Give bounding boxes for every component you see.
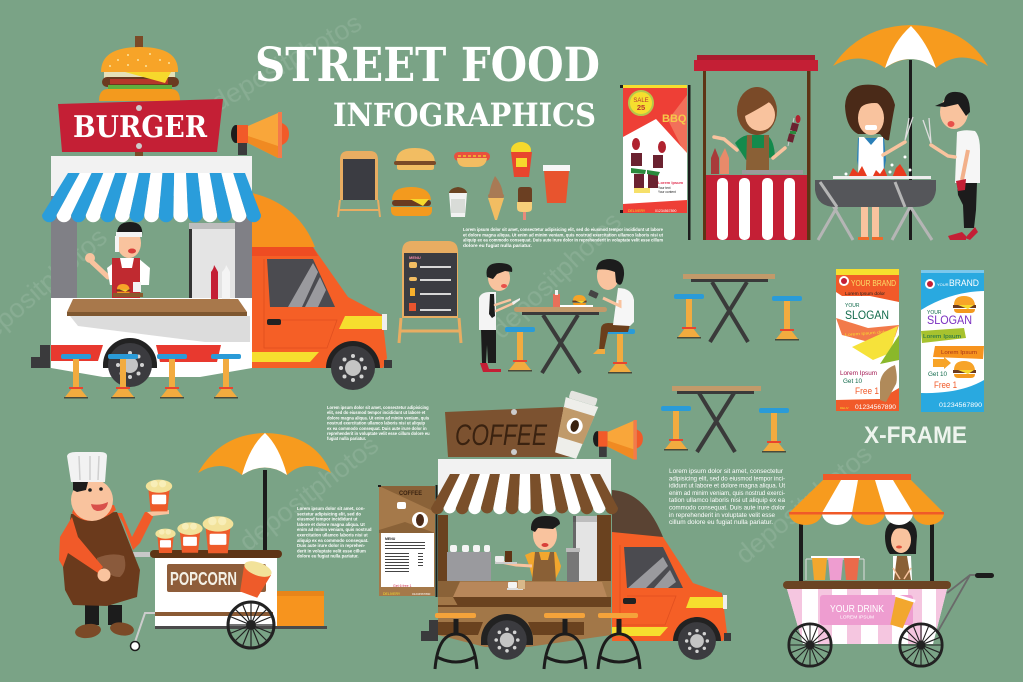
table B	[672, 386, 761, 452]
x-frame blue	[921, 270, 984, 412]
barista	[495, 516, 580, 583]
x-frame orange	[836, 269, 899, 411]
popcorn cups	[155, 516, 233, 553]
menu board: MENU	[409, 255, 421, 260]
coffee banner: MENU	[385, 537, 396, 541]
table A	[683, 274, 775, 342]
drink cart	[783, 474, 994, 666]
text block: right of coffee truck: ididunt ut labore et dolore magna aliqua. Ut	[669, 483, 785, 490]
x-frame orange: Free 1	[855, 386, 879, 396]
BBQ banner: 25	[637, 103, 645, 112]
watermarks: depositphotos	[233, 430, 384, 557]
icon: fries	[511, 142, 532, 177]
megaphone	[231, 112, 289, 158]
coffee banner	[378, 485, 438, 597]
stool: table B right	[759, 408, 789, 452]
text block: top centre: dolore eu fugiat nulla pariatur.	[463, 243, 532, 249]
BBQ banner: Your text	[658, 186, 671, 190]
x-frame blue: SLOGAN	[927, 313, 972, 327]
text block: popcorn: eiusmod tempor incididunt ut	[297, 517, 358, 522]
x-frame orange: Get 10	[843, 378, 862, 385]
text block: middle: dolore magna aliqua. Ut enim ad minim veniam, quis	[327, 415, 430, 420]
title: INFOGRAPHICS	[333, 96, 596, 134]
coffee banner: Get 6 free 1	[393, 584, 412, 588]
watermarks: depositphotos	[730, 439, 878, 570]
burger food truck	[31, 36, 392, 398]
text block: middle: nostrud exercitation ullamco laboris nisi ut aliquip	[327, 421, 426, 426]
burger sign	[58, 99, 223, 156]
x-frame orange: Lorem Ipsum	[840, 371, 877, 377]
coffee box	[421, 459, 611, 660]
x-frame orange: YOUR	[845, 303, 860, 309]
truck box	[31, 156, 252, 387]
x-frame orange: 01234567890	[855, 405, 897, 411]
BBQ stall	[694, 55, 818, 240]
text block: right of coffee truck: tation ullamco laboris nisi ut aliquip ex ea	[669, 497, 786, 504]
text block: popcorn: Duis aute irure dolor in reprehen-	[297, 543, 366, 548]
griller man	[923, 92, 980, 240]
text block: middle	[327, 405, 430, 441]
x-frame orange: YOUR BRAND	[851, 279, 896, 288]
drink roof	[789, 474, 944, 525]
text block: top centre: aliquip ex ea commodo consequat. Duis aute irure dolor in reprehenderit in voluptate velit esse cillum	[463, 238, 663, 244]
grill	[815, 156, 936, 240]
coffee food truck	[421, 389, 731, 669]
x-frame orange: DELIV	[840, 406, 849, 410]
text block: middle: fugiat nulla pariatur.	[327, 436, 366, 441]
icon: hot dog	[454, 152, 490, 167]
x-frame blue: Free 1	[934, 380, 957, 390]
truck cab	[252, 193, 392, 390]
text block: right of coffee truck: enim ad minim veniam, quis nostrud exerci-	[669, 490, 785, 497]
watermarks: depositphotos	[206, 7, 367, 117]
BBQ banner: SALE	[633, 98, 649, 104]
umbrella: popcorn	[198, 433, 331, 552]
cart body	[783, 581, 951, 666]
text block: right of coffee truck: commodo consequat. Duis aute irure dolor	[669, 504, 785, 512]
x-frame blue: BRAND	[949, 278, 979, 288]
chef	[59, 452, 172, 640]
megaphone coffee	[593, 420, 643, 460]
coffee counter	[438, 580, 611, 607]
icon: small chalkboard	[338, 151, 380, 217]
text block: middle: Lorem ipsum dolor sit amet, consectetur adipisicing	[327, 405, 429, 410]
food icons	[338, 142, 570, 220]
text block: popcorn: enim ad minim veniam, quis nostrud	[297, 527, 372, 532]
icon: coffee cup	[449, 187, 467, 217]
standing man	[479, 263, 520, 372]
stools	[505, 327, 535, 372]
x-frame blue: YOUR	[937, 282, 949, 287]
truck stools	[61, 354, 241, 398]
coffee sign	[445, 407, 573, 457]
x-frame blue: Get 10	[928, 371, 947, 378]
text block: top centre	[463, 227, 663, 249]
text block: middle: elit, sed do eiusmod tempor incididunt ut labore et	[327, 410, 426, 415]
x-frame label: X-FRAME	[864, 422, 967, 449]
cart body	[112, 549, 327, 650]
icon: ice cream	[488, 176, 504, 220]
stool: table A right	[772, 296, 802, 340]
griller woman	[845, 85, 913, 240]
icon: burger	[391, 187, 432, 216]
cart body: LOREM IPSUM	[840, 614, 874, 620]
table with food	[514, 290, 607, 373]
stool right	[605, 329, 635, 374]
coffee banner: 01234567890	[412, 592, 431, 596]
seated man	[588, 259, 634, 354]
coffee cup sign	[549, 389, 601, 461]
x-frame blue: YOUR	[927, 310, 942, 316]
cart body: YOUR DRINK	[830, 603, 884, 615]
title	[255, 38, 600, 134]
text block: right of coffee truck: in reprehenderit in voluptate velit esse	[669, 512, 776, 519]
x-frame orange: SLOGAN	[845, 308, 889, 322]
menu board	[399, 241, 461, 343]
watermarks: depositphotos	[485, 206, 627, 344]
text block: popcorn	[297, 506, 372, 559]
text block: right of coffee truck: adipisicing elit, sed do eiusmod tempor inci-	[669, 475, 785, 482]
coffee awning	[431, 474, 618, 514]
burger vendor	[85, 222, 150, 298]
x-frame blue: Lorem Ipsum	[923, 334, 961, 340]
stool: table B left	[661, 406, 691, 450]
x-frame blue: Lorem Ipsum	[941, 350, 977, 356]
BBQ banner	[620, 85, 690, 240]
icon: red cup	[543, 165, 570, 203]
text block: middle: reprehenderit in voluptate velit esse cillum dolore eu	[327, 431, 430, 436]
stall vendor	[711, 87, 803, 174]
coffee sign: COFFEE	[455, 419, 548, 452]
umbrella: BBQ	[833, 25, 988, 240]
BBQ banner: Your content	[658, 190, 676, 194]
text block: right of coffee truck: Lorem ipsum dolor sit amet, consectetur	[669, 468, 783, 475]
burger sign topper	[99, 36, 180, 101]
popcorn cart	[59, 433, 331, 650]
cart posts	[799, 522, 934, 582]
text block: middle: ex ea commodo consequat. Duis aute irure dolor in	[327, 426, 427, 431]
diners at table	[479, 259, 635, 374]
cart handle	[937, 573, 994, 633]
BBQ banner: 01234567890	[655, 209, 676, 213]
burger sign: BURGER	[73, 110, 208, 145]
coffee cab	[612, 490, 731, 660]
x-frame blue: 01234567890	[939, 403, 983, 409]
stall counter	[706, 175, 807, 240]
coffee stools	[435, 613, 640, 669]
BBQ banner: DELIVERY	[628, 209, 646, 213]
stool: table A left	[674, 294, 704, 338]
coffee banner: DELIVERY	[383, 592, 401, 596]
coffee banner: COFFEE	[399, 491, 422, 497]
icon: popsicle	[517, 187, 532, 220]
cart body: POPCORN	[170, 569, 237, 589]
BBQ banner: Lorem Ipsum	[658, 180, 684, 185]
icon: bun	[394, 148, 436, 170]
watermarks	[0, 7, 878, 570]
text block: popcorn: exercitation ullamco laboris nisi ut	[297, 532, 368, 538]
text block: popcorn: labore et dolore magna aliqua. Ut	[297, 522, 365, 527]
text block: right of coffee truck: cillum dolore eu fugiat nulla pariatur.	[669, 519, 773, 526]
stall roof	[694, 55, 818, 71]
text block: popcorn: derit in voluptate velit esse cillum	[297, 548, 366, 553]
text block: popcorn: Lorem ipsum dolor sit amet, con-	[297, 506, 365, 511]
text block: popcorn: dolore eu fugiat nulla pariatur.	[297, 554, 359, 559]
text block: top centre: et dolore magna aliqua. Ut enim ad minim veniam, quis nostrud exercitation ullamco laboris nisi ut	[463, 232, 663, 238]
text block: right of coffee truck	[669, 468, 786, 526]
truck counter and bottles	[67, 265, 247, 316]
drink vendor	[885, 519, 917, 580]
x-frame orange: Lorem Ipsum dolor	[845, 291, 886, 296]
title: STREET FOOD	[255, 38, 600, 93]
x-frame orange: Lorem ipsum dolor	[845, 329, 890, 337]
text block: popcorn: aliquip ex ea commodo consequat.	[297, 538, 368, 543]
text block: popcorn: sectetur adipisicing elit, sed do	[297, 511, 361, 516]
drink cups on rack	[806, 556, 864, 580]
BBQ banner: BBQ	[662, 113, 687, 125]
text block: top centre: Lorem ipsum dolor sit amet, consectetur adipisicing elit, sed do eiusmod tempor incididunt ut labore	[463, 227, 663, 233]
awning blue	[42, 173, 261, 222]
